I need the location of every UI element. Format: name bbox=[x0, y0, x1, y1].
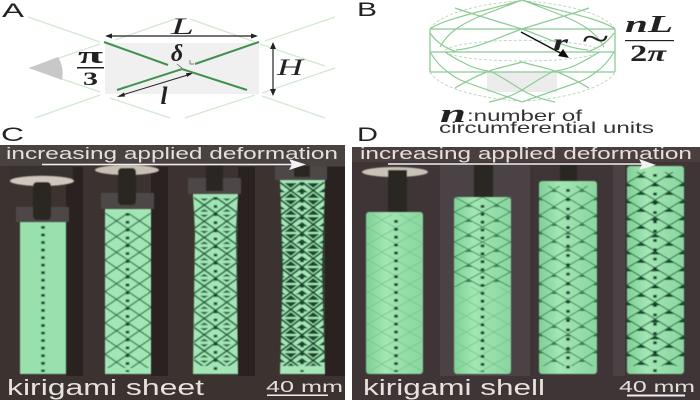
scale bar D bbox=[619, 379, 695, 396]
arrow l bbox=[117, 73, 193, 110]
dark strip shadows bbox=[66, 167, 345, 376]
panel C: kirigami sheet photo bbox=[0, 144, 345, 400]
deformation heading C: increasing applied deformation bbox=[6, 144, 338, 163]
panel A: unit cell diagram bbox=[28, 14, 335, 118]
formula r ~ nL/2pi: ~ bbox=[582, 21, 609, 58]
strip 2 bbox=[105, 209, 151, 374]
scale bar C: 40 mm bbox=[266, 379, 343, 396]
fraction pi over 3: π bbox=[78, 43, 103, 69]
clamps and grips bbox=[10, 165, 327, 222]
caption shell: kirigami shell bbox=[363, 375, 545, 400]
arrow L: L bbox=[169, 14, 194, 39]
shell 3 bbox=[539, 181, 597, 374]
label D: D bbox=[357, 125, 378, 146]
arrow D bbox=[388, 159, 656, 170]
formula r ~ nL/2pi: nL bbox=[625, 12, 673, 38]
label B: B bbox=[357, 0, 377, 21]
arrow H bbox=[270, 42, 305, 96]
caption n: :number of bbox=[467, 108, 583, 125]
caption sheet: kirigami sheet bbox=[7, 375, 204, 400]
faint neighbouring cuts bbox=[28, 17, 335, 118]
top band bbox=[0, 145, 345, 166]
radius arrow r: r bbox=[553, 30, 570, 55]
radius arrow r bbox=[521, 30, 570, 58]
strip 4 bbox=[280, 180, 325, 374]
gray unit cell bbox=[487, 72, 557, 92]
arrow L bbox=[105, 14, 258, 39]
shell 2 bbox=[454, 197, 511, 374]
strip 1 bbox=[20, 222, 66, 374]
grips bbox=[362, 165, 577, 213]
label C: C bbox=[1, 125, 24, 146]
dashed outline bbox=[430, 1, 615, 101]
delta gap label bbox=[171, 41, 194, 68]
dark green cuts bbox=[104, 42, 259, 90]
formula r ~ nL/2pi: 2π bbox=[630, 41, 668, 66]
arrow H: H bbox=[275, 55, 305, 80]
panel B: cylinder diagram bbox=[430, 0, 674, 137]
green lattice bbox=[430, 29, 615, 72]
unit cell shaded rectangle bbox=[105, 43, 259, 94]
fraction pi over 3 bbox=[77, 43, 104, 90]
formula r ~ nL/2pi bbox=[582, 12, 674, 66]
angle wedge bbox=[29, 57, 63, 80]
fraction pi over 3: 3 bbox=[83, 69, 98, 90]
caption n: circumferential units bbox=[439, 120, 654, 137]
caption n: n bbox=[440, 99, 466, 128]
delta gap label: δ bbox=[171, 41, 183, 67]
shell 1 bbox=[366, 212, 423, 374]
arrow l: l bbox=[161, 83, 168, 110]
scale bar D: 40 mm bbox=[619, 379, 695, 396]
scale bar C bbox=[266, 379, 343, 396]
label A: A bbox=[2, 1, 25, 22]
deformation heading D: increasing applied deformation bbox=[360, 144, 692, 163]
shell 4 bbox=[627, 166, 684, 374]
strip 3 bbox=[193, 194, 238, 374]
caption n bbox=[439, 99, 654, 137]
panel D: kirigami shell photo bbox=[352, 144, 700, 400]
arrow C bbox=[42, 159, 306, 170]
